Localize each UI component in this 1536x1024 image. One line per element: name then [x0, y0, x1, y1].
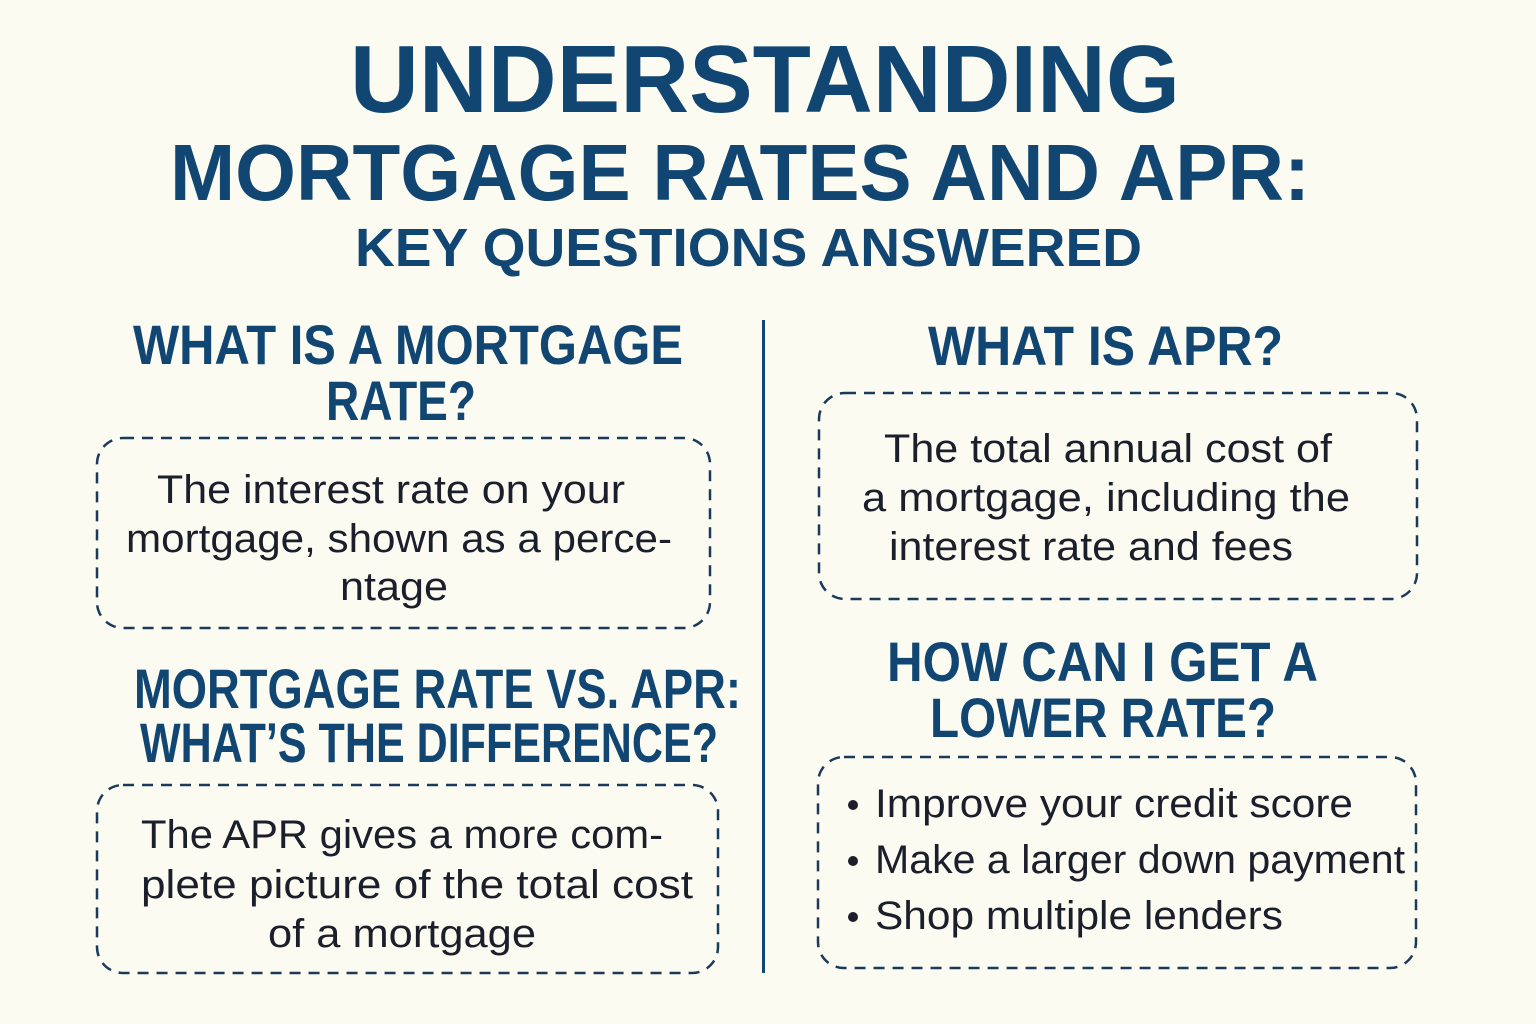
- panel: apr definition: interest rate and fees: [889, 525, 1293, 569]
- panel: difference: plete picture of the total cost: [141, 863, 693, 907]
- divider: [762, 320, 765, 973]
- heading: lower rate: [887, 630, 1318, 749]
- panel: tips list: Improve your credit score: [875, 782, 1353, 826]
- heading: rate vs apr: WHAT’S THE DIFFERENCE?: [140, 711, 718, 774]
- heading: what is a mortgage rate: [133, 313, 683, 432]
- title: MORTGAGE RATES AND APR:: [170, 128, 1310, 217]
- panel: tips list: Make a larger down payment: [875, 838, 1405, 882]
- heading: lower rate: HOW CAN I GET A: [887, 630, 1318, 693]
- title: KEY QUESTIONS ANSWERED: [355, 218, 1142, 278]
- panel: apr definition: a mortgage, including the: [862, 476, 1350, 520]
- panel: tips list: Shop multiple lenders: [875, 894, 1283, 938]
- title: UNDERSTANDING: [350, 26, 1180, 133]
- panel: mortgage rate definition: mortgage, shown as a perce-: [126, 517, 672, 561]
- title: [170, 26, 1310, 278]
- heading: rate vs apr: [134, 657, 741, 774]
- panel: tips list: [818, 757, 1416, 968]
- panel: mortgage rate definition: The interest rate on your: [157, 468, 625, 512]
- panel: mortgage rate definition: ntage: [340, 565, 448, 609]
- heading: rate vs apr: MORTGAGE RATE VS. APR:: [134, 657, 741, 720]
- heading: what is apr: WHAT IS APR?: [928, 314, 1283, 377]
- panel: apr definition: The total annual cost of: [884, 427, 1333, 471]
- panel: difference: of a mortgage: [268, 912, 536, 956]
- panel: difference: The APR gives a more com-: [141, 813, 663, 857]
- panel: apr definition: [819, 393, 1417, 599]
- heading: what is a mortgage rate: RATE?: [326, 369, 476, 432]
- heading: lower rate: LOWER RATE?: [930, 686, 1276, 749]
- panel: mortgage rate definition: [97, 438, 710, 628]
- panel: difference: [97, 785, 718, 973]
- heading: what is a mortgage rate: WHAT IS A MORTGAGE: [133, 313, 683, 376]
